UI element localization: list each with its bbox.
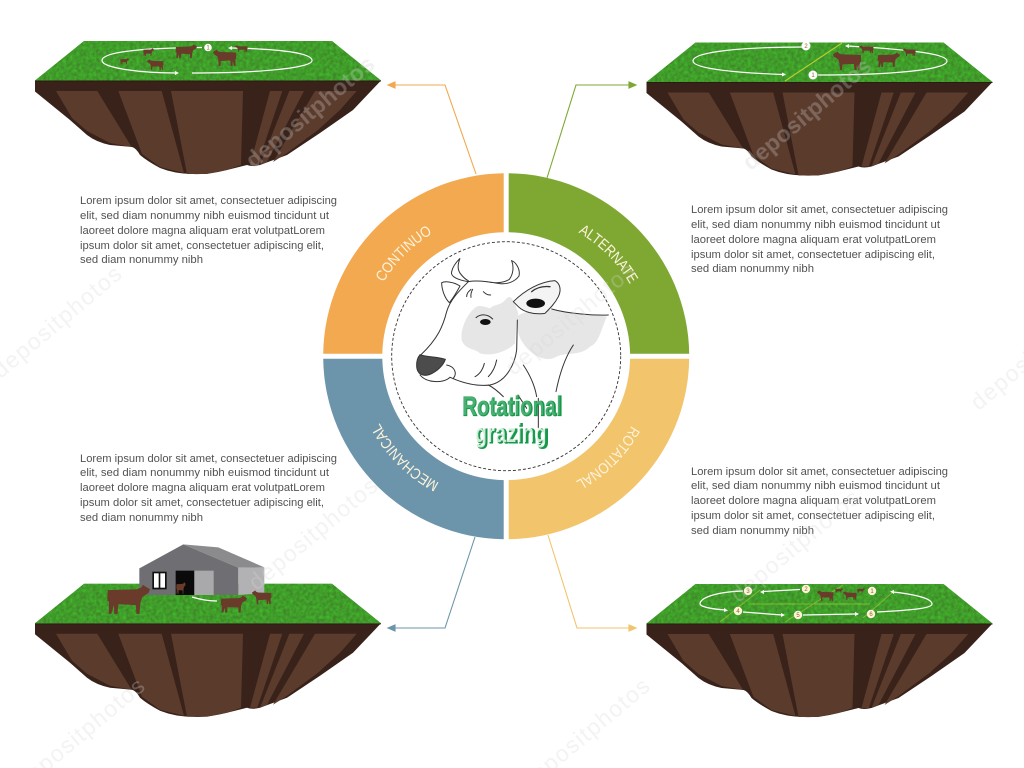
title: Rotational grazing: Rotational xyxy=(462,391,561,421)
number badges 1 to 6: 1 xyxy=(870,589,874,595)
number badges 1 to 6: 3 xyxy=(746,589,750,595)
text block: bottom right xyxy=(691,466,948,537)
number badges 1 and 2: 1 xyxy=(811,73,815,79)
stock photo watermarks on background: depositphotos xyxy=(725,484,864,607)
text block: bottom right: ipsum dolor sit amet, consectetuer adipiscing elit, xyxy=(691,510,935,522)
island: mechanical grazing with barn xyxy=(35,544,381,717)
ring diagram xyxy=(323,173,690,540)
island: continuous grazing xyxy=(35,41,381,174)
paddock dividers xyxy=(720,585,893,622)
text block: top left: Lorem ipsum dolor sit amet, consectetuer adipiscing xyxy=(80,195,337,207)
number badges 1 and 2 xyxy=(802,42,818,80)
title: Rotational grazing xyxy=(462,391,562,449)
text block: bottom right: sed diam nonummy nibh xyxy=(691,525,814,537)
segment: continuo xyxy=(323,173,504,354)
stock photo watermarks over islands: depositphotos xyxy=(737,52,876,175)
island: rotational grazing xyxy=(646,584,992,717)
grazing loop arrows xyxy=(102,46,312,75)
text block: top left: sed diam nonummy nibh xyxy=(80,254,203,266)
rotation arrows xyxy=(700,590,932,617)
connector arrow: rotational xyxy=(548,535,636,631)
text block: top left: elit, sed diam nonummy nibh euismod tincidunt ut xyxy=(80,210,330,222)
cows xyxy=(107,585,271,614)
text block: top left: laoreet dolore magna aliquam erat volutpatLorem xyxy=(80,225,325,237)
title: Rotational grazing: grazing xyxy=(476,419,549,449)
text block: bottom left: Lorem ipsum dolor sit amet, consectetuer adipiscing xyxy=(80,453,337,465)
text block: top left xyxy=(80,195,337,266)
number badges 1 and 2: 2 xyxy=(804,44,808,50)
segment: mechanical xyxy=(323,358,504,540)
white path arrow xyxy=(192,597,217,601)
segment: mechanical: MECHANICAL xyxy=(372,423,438,492)
cow head illustration xyxy=(417,258,608,428)
stock photo watermarks over islands: depositphotos xyxy=(240,50,379,173)
number badges 1 to 6 xyxy=(734,585,876,619)
paddock divider xyxy=(785,43,842,81)
text block: bottom right: Lorem ipsum dolor sit amet, consectetuer adipiscing xyxy=(691,466,948,478)
text block: bottom left: sed diam nonummy nibh xyxy=(80,512,203,524)
connector arrow: alternate xyxy=(547,82,636,178)
number badges 1 to 6: 4 xyxy=(736,609,740,615)
number badge 1 xyxy=(204,44,212,52)
connector arrow: mechanical xyxy=(388,537,475,631)
text block: top right: elit, sed diam nonummy nibh euismod tincidunt ut xyxy=(691,219,941,231)
stock photo watermarks on background xyxy=(0,257,1024,768)
number badges 1 to 6: 6 xyxy=(869,612,873,618)
stock photo watermarks on background: depositphotos xyxy=(243,472,382,595)
text block: top right: sed diam nonummy nibh xyxy=(691,263,814,275)
cows xyxy=(120,44,248,70)
stock photo watermarks on background: depositphotos xyxy=(500,257,639,380)
segment: rotational xyxy=(508,358,690,540)
stock photo watermarks over islands xyxy=(240,50,876,175)
text block: bottom right: elit, sed diam nonummy nibh euismod tincidunt ut xyxy=(691,480,941,492)
text block: top left: ipsum dolor sit amet, consectetuer adipiscing elit, xyxy=(80,240,324,252)
text block: bottom left: ipsum dolor sit amet, consectetuer adipiscing elit, xyxy=(80,497,324,509)
segment: alternate xyxy=(508,173,690,354)
number badges 1 to 6: 5 xyxy=(796,613,800,619)
number badges 1 to 6: 2 xyxy=(804,587,808,593)
text block: bottom left: laoreet dolore magna aliquam erat volutpatLorem xyxy=(80,482,325,494)
grazing loop arrows xyxy=(693,44,947,76)
segment: alternate: ALTERNATE xyxy=(578,226,638,284)
title: Rotational grazing: grazing xyxy=(474,418,546,448)
cows xyxy=(833,45,916,70)
text block: bottom left xyxy=(80,453,337,524)
barn xyxy=(139,544,264,595)
dashed inner circle xyxy=(392,242,621,471)
text block: top right: ipsum dolor sit amet, consectetuer adipiscing elit, xyxy=(691,249,935,261)
text block: bottom right: laoreet dolore magna aliquam erat volutpatLorem xyxy=(691,495,936,507)
title: Rotational grazing: Rotational xyxy=(462,392,562,422)
text block: top right xyxy=(691,204,948,275)
number badge 1: 1 xyxy=(206,46,210,52)
text block: top right: Lorem ipsum dolor sit amet, consectetuer adipiscing xyxy=(691,204,948,216)
segment: rotational: ROTATIONAL xyxy=(576,426,640,488)
text block: bottom left: elit, sed diam nonummy nibh euismod tincidunt ut xyxy=(80,467,330,479)
connector arrow: continuo xyxy=(388,82,476,174)
segment: continuo: CONTINUO xyxy=(376,226,430,280)
cows xyxy=(817,588,865,601)
text block: top right: laoreet dolore magna aliquam erat volutpatLorem xyxy=(691,234,936,246)
island: alternate grazing xyxy=(646,42,992,176)
